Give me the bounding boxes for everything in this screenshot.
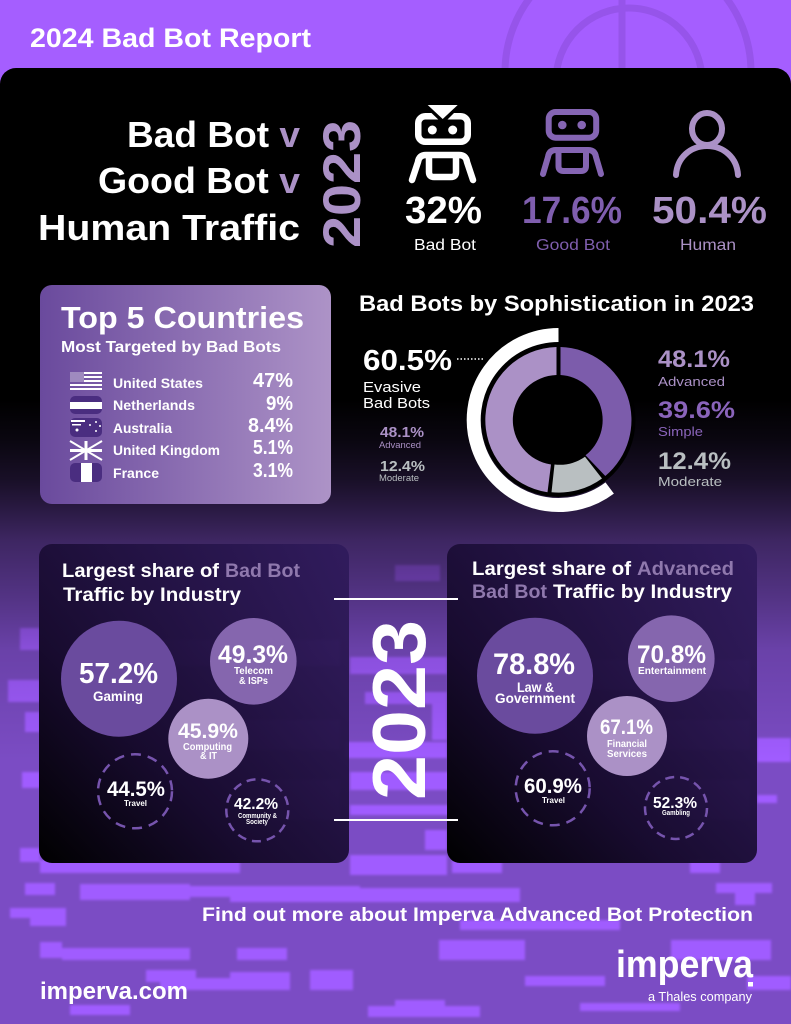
row: australia (70, 415, 293, 437)
row: france: 3.1% (253, 460, 293, 482)
bubble: financial services: Services (607, 749, 647, 760)
heading: top 5 countries: Top 5 Countries (61, 300, 304, 335)
row: france: France (113, 465, 159, 481)
row: united kingdom (70, 437, 293, 460)
call to action: Find out more about Imperva Advanced Bot Protection (202, 905, 753, 926)
segment: moderate (552, 457, 602, 493)
callout: evasive bad bots (363, 345, 483, 484)
icon: bad bot (412, 103, 473, 180)
row: united kingdom: 5.1% (253, 437, 293, 459)
bubble: computing: & IT (200, 750, 217, 762)
heading (62, 560, 301, 606)
heading: Advanced (637, 558, 734, 580)
subheading: Most Targeted by Bad Bots (61, 339, 281, 356)
legend: sophistication: 12.4% (658, 448, 731, 475)
vertical year 2023: 2023 (313, 120, 372, 248)
bubble: financial services (587, 696, 667, 776)
legend: sophistication: Advanced (658, 374, 725, 389)
row: united states (70, 370, 293, 392)
stat: bad bot (405, 103, 482, 254)
bubble: community: Community & (238, 813, 277, 820)
outer arc: evasive (474, 335, 610, 505)
heading: bad bot v good bot v human traffic: Bad Bot v (127, 114, 300, 155)
bubble: gambling: Gambling (662, 810, 690, 817)
heading: bad bot v good bot v human traffic: Good Bot v (98, 160, 300, 201)
donut chart (474, 335, 636, 505)
legend: sophistication: 39.6% (658, 397, 735, 424)
centre year 2023: 2023 (357, 620, 441, 800)
heading: bad bots by sophistication: Bad Bots by Sophistication in 2023 (359, 291, 754, 316)
heading: Bad Bot (472, 581, 548, 603)
row: france (70, 460, 293, 482)
donut backing (482, 343, 636, 497)
callout: evasive bad bots: Bad Bots (363, 395, 430, 412)
callout: evasive bad bots: Advanced (379, 440, 421, 451)
legend: sophistication: Moderate (658, 474, 722, 489)
row: australia: Australia (113, 420, 172, 436)
stat: human (652, 113, 767, 254)
bubble: community: Society (246, 819, 268, 826)
imperva logo (616, 944, 754, 1004)
panel: top 5 countries (40, 285, 331, 504)
stat: good bot (522, 112, 622, 254)
imperva logo: imperva (616, 944, 754, 986)
bubble: community (226, 779, 288, 841)
row: netherlands: Netherlands (113, 397, 195, 413)
callout: evasive bad bots: 12.4% (380, 458, 425, 475)
heading: Traffic by Industry (553, 581, 732, 603)
heading (472, 558, 734, 603)
row: netherlands: 9% (266, 393, 293, 415)
row: united states: 47% (253, 370, 293, 392)
bubble: computing (168, 699, 248, 779)
bubble: travel: 60.9% (524, 775, 582, 798)
bubble: entertainment: Entertainment (638, 665, 706, 677)
bubble: law and government (477, 618, 593, 734)
callout: evasive bad bots: Evasive (363, 379, 421, 396)
bubble: law and government: 78.8% (493, 648, 575, 681)
bubble: law and government: Government (495, 690, 575, 706)
imperva logo: a Thales company (648, 989, 752, 1004)
stat: bad bot: 32% (405, 190, 482, 232)
callout: evasive bad bots: 60.5% (363, 345, 452, 377)
row: united kingdom: United Kingdom (113, 442, 220, 458)
segment: advanced (560, 347, 631, 476)
bubble: law and government: Law & (517, 679, 554, 695)
panel: share of bad bot traffic (39, 544, 349, 863)
bubble: travel: Travel (542, 795, 565, 805)
stat: bad bot: Bad Bot (414, 237, 477, 254)
bubble: travel (516, 751, 590, 825)
bubble: gaming (61, 621, 177, 737)
bubble: entertainment (628, 615, 715, 702)
bubble: travel: 44.5% (107, 778, 165, 801)
heading: Bad Bot (225, 560, 301, 582)
bubble: travel (98, 754, 172, 828)
row: australia: 8.4% (248, 415, 293, 437)
legend: sophistication: Simple (658, 424, 703, 439)
stat: good bot: Good Bot (536, 237, 611, 254)
glitch pattern (8, 565, 791, 1017)
bubble: entertainment: 70.8% (637, 641, 706, 669)
stat: human: 50.4% (652, 190, 767, 232)
bubble: gambling: 52.3% (653, 795, 697, 812)
bubble: telecom: & ISPs (239, 675, 268, 687)
bubble: telecom: 49.3% (218, 641, 288, 669)
row: netherlands (70, 393, 293, 415)
website: imperva.com (40, 978, 188, 1005)
bubble: gambling (645, 777, 707, 839)
bubble: telecom: Telecom (234, 665, 273, 677)
bubble: computing: 45.9% (178, 719, 238, 743)
bubble: travel: Travel (124, 798, 147, 808)
callout: evasive bad bots: 48.1% (380, 424, 424, 441)
icon: human (676, 113, 738, 175)
bubble: financial services: 67.1% (600, 716, 653, 739)
legend: sophistication (658, 346, 735, 489)
bubble: gaming: Gaming (93, 688, 143, 704)
segment: simple (485, 347, 556, 492)
callout: evasive bad bots: Moderate (379, 473, 419, 484)
legend: sophistication: 48.1% (658, 346, 730, 373)
icon: good bot (543, 112, 601, 174)
header band (0, 0, 791, 90)
row: united states: United States (113, 375, 203, 391)
heading: Largest share of (472, 558, 632, 580)
panel: share of advanced bad bot traffic (447, 544, 757, 863)
centre year 2023 (334, 599, 458, 820)
heading: bad bot v good bot v human traffic: Human Traffic (38, 207, 300, 248)
bubble: financial services: Financial (607, 739, 647, 750)
bubble: computing: Computing (183, 741, 232, 753)
report title: 2024 Bad Bot Report (30, 23, 311, 53)
heading: bad bot v good bot v human traffic (38, 114, 300, 248)
watermark target (505, 0, 751, 195)
stat: good bot: 17.6% (522, 190, 622, 232)
bubble: gaming: 57.2% (79, 658, 158, 690)
heading: Largest share of (62, 560, 220, 582)
stat: human: Human (680, 237, 736, 254)
heading: Traffic by Industry (63, 584, 241, 606)
bubble: telecom (210, 618, 297, 705)
bubble: community: 42.2% (234, 796, 278, 813)
